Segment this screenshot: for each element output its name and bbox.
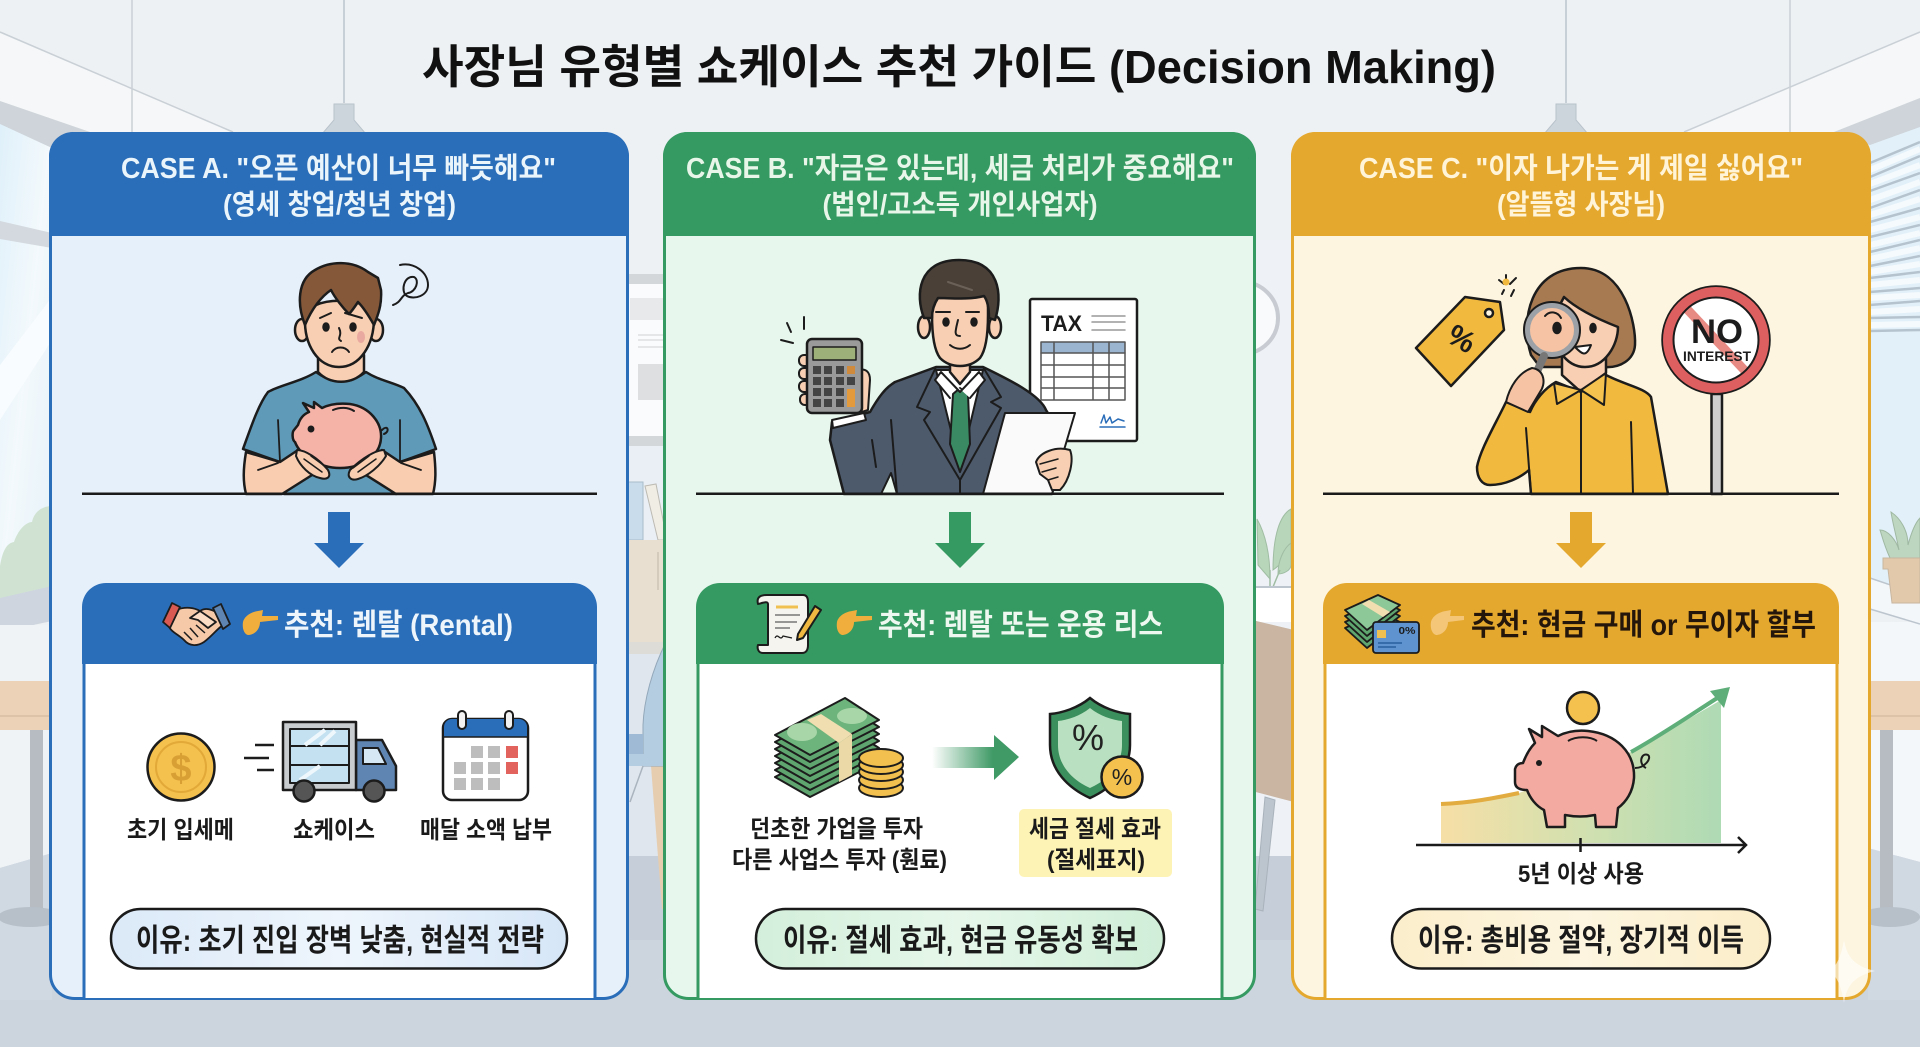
icon: handshake [163, 603, 230, 645]
recommendation heading: 추천: 렌탈 또는 운용 리스 [878, 609, 1163, 642]
highlighted label: 세금 절세 효과 [1029, 816, 1161, 843]
reason pill [111, 909, 567, 968]
reason pill: 이유: 초기 진입 장벽 낮춤, 현실적 전략 [136, 923, 544, 958]
chart: long-term savings [1416, 687, 1746, 853]
reason pill [756, 909, 1164, 968]
rule [1323, 492, 1839, 495]
heading: case A: CASE A. "오픈 예산이 너무 빠듯해요" [121, 152, 556, 185]
gap between case B and C: clock, plant, table [1252, 240, 1294, 856]
title: 사장님 유형별 쇼케이스 추천 가이드 (Decision Making) [422, 41, 1496, 93]
rule [696, 492, 1224, 495]
calculator [781, 317, 870, 414]
icon: pointing hand [837, 610, 872, 635]
arrow: gradient [932, 735, 1019, 780]
recommendation card: rental [82, 583, 597, 998]
icon: calendar [443, 711, 528, 800]
heading: case A: (영세 창업/청년 창업) [223, 189, 456, 220]
icon: tax saving shield [1050, 698, 1142, 798]
icon: coin [148, 734, 214, 800]
recommendation card: lease [696, 583, 1224, 998]
icon: coin: $ [170, 748, 192, 790]
arrow down [314, 512, 364, 568]
icon: cash and 0% card: 0% [1398, 626, 1416, 637]
no interest sign: NO [1691, 313, 1743, 351]
icon: pointing hand [243, 610, 278, 635]
no interest sign: INTEREST [1683, 348, 1751, 364]
label: 다른 사업스 투자 (훤료) [732, 847, 947, 874]
highlighted label [1019, 809, 1172, 877]
label: 던초한 가업을 투자 [750, 816, 923, 843]
reason pill: 이유: 총비용 절약, 장기적 이득 [1418, 923, 1744, 958]
icon: cash stack and coins [775, 698, 903, 797]
icon: tax saving shield: % [1072, 717, 1104, 758]
illustration: businessman with calculator and tax form [781, 260, 1137, 494]
price tag: % [1441, 318, 1481, 360]
illustration: woman with magnifier, tag and no-interest sign [1416, 268, 1770, 494]
label: 매달 소액 납부 [420, 817, 552, 844]
heading: case A [121, 152, 556, 220]
arrow down [935, 512, 985, 568]
panel: case C [1291, 132, 1871, 998]
icon: pointing hand [1431, 610, 1464, 635]
arrow down [1556, 512, 1606, 568]
heading: case C: (알뜰형 사장님) [1497, 189, 1665, 220]
label: 쇼케이스 [293, 817, 375, 844]
recommendation heading: 추천: 렌탈 (Rental) [284, 609, 513, 642]
pendant lamps [344, 0, 1566, 103]
icon: piggy bank [1515, 726, 1649, 827]
sparkle mark [1830, 940, 1875, 1003]
reason pill: 이유: 절세 효과, 현금 유동성 확보 [783, 923, 1138, 958]
icon: falling coin [1567, 692, 1599, 724]
panel: case B [663, 132, 1256, 998]
right window with blinds [1868, 120, 1920, 590]
recommendation heading: 추천: 현금 구매 or 무이자 할부 [1471, 609, 1816, 642]
heading: case B [686, 152, 1234, 220]
icon: contract scroll [758, 595, 821, 653]
heading: case C [1359, 152, 1803, 220]
gap between case A and B: shelf, cabinet, chair [626, 274, 666, 284]
icon: tax saving shield: % [1112, 764, 1132, 790]
no interest sign [1662, 286, 1770, 494]
icon: cash and 0% card [1345, 595, 1419, 653]
tax document: TAX [1041, 311, 1082, 336]
illustration: worried man holding piggy bank [243, 263, 436, 494]
label: 5년 이상 사용 [1518, 861, 1644, 888]
heading: case B: (법인/고소득 개인사업자) [822, 189, 1098, 220]
icon: showcase truck [244, 722, 396, 802]
label: 초기 입세메 [127, 817, 234, 844]
left window [0, 120, 52, 600]
recommendation card: cash purchase [1323, 583, 1839, 998]
tax document [1030, 299, 1137, 441]
price tag [1416, 275, 1516, 386]
label [732, 816, 947, 874]
reason pill [1392, 909, 1770, 968]
panel: case A [49, 132, 629, 998]
rule [82, 492, 597, 495]
heading: case C: CASE C. "이자 나가는 게 제일 싫어요" [1359, 152, 1803, 185]
heading: case B: CASE B. "자금은 있는데, 세금 처리가 중요해요" [686, 152, 1234, 185]
highlighted label: (절세표지) [1047, 847, 1145, 874]
